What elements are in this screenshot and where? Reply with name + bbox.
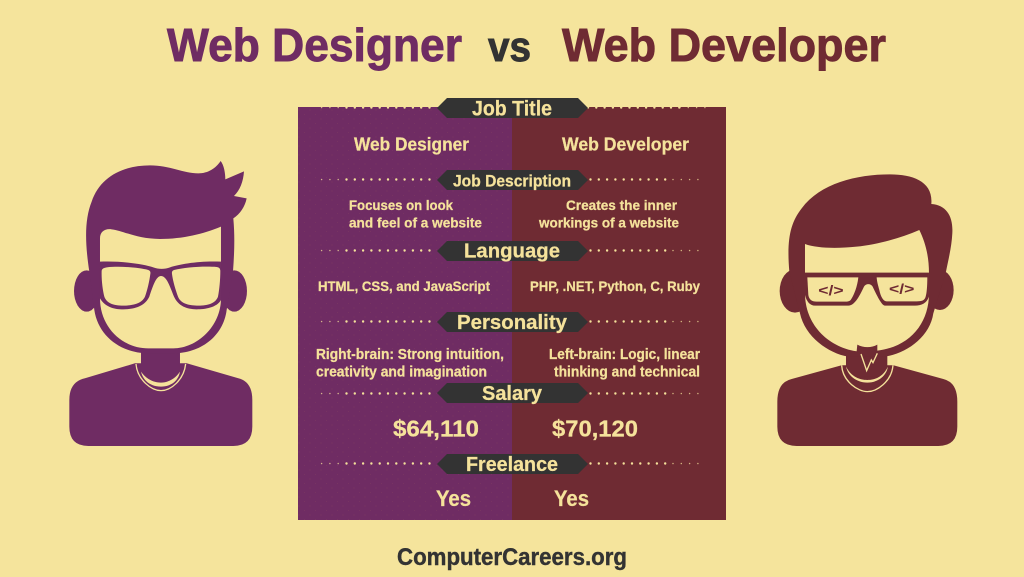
text: job descriptions: and feel of a website [349,214,482,230]
text: personalities: thinking and technical [554,364,700,380]
text: freelance answers: Yes [436,486,471,511]
banner: salary [437,383,588,405]
text: job descriptions: workings of a website [538,214,679,230]
footer source: ComputerCareers.org [397,544,627,571]
text: job descriptions [349,197,679,230]
banner: language [437,240,588,262]
text: salaries: $70,120 [552,416,638,442]
panel: comparison table [298,98,726,520]
banner: freelance: Freelance [466,454,558,476]
text: personalities: creativity and imagination [316,364,487,380]
text: job descriptions: Creates the inner [566,197,678,213]
icon: web developer avatar: </> [818,282,844,298]
text: languages: HTML, CSS, and JavaScript [318,278,490,294]
banner: freelance [437,454,588,476]
banner: personality: Personality [457,312,568,334]
banner: salary: Salary [482,383,543,405]
text: languages [318,278,700,294]
banner: language: Language [464,240,560,262]
text: freelance answers [436,486,589,511]
text: personalities [316,347,700,380]
column headings: job title: Web Developer [562,134,689,154]
icon: web developer avatar: </> [889,281,914,297]
text: salaries: $64,110 [393,416,479,442]
title: Web Developer [562,19,886,71]
text: freelance answers: Yes [554,486,589,511]
text: languages: PHP, .NET, Python, C, Ruby [530,278,700,294]
dotted rows [322,108,710,464]
text: personalities: Left-brain: Logic, linear [549,347,700,363]
panel: designer column [298,107,512,520]
title: Web Designer [167,19,462,71]
icon: web designer avatar [69,161,252,446]
text: salaries [393,416,638,442]
icon: web developer avatar [777,174,957,446]
column headings: job title [354,134,689,154]
banner: job description: Job Description [453,172,571,190]
title [167,19,886,71]
text: personalities: Right-brain: Strong intuition, [316,347,504,363]
column headings: job title: Web Designer [354,134,469,154]
text: job descriptions: Focuses on look [349,197,453,213]
banner: job title: Job Title [472,98,552,120]
panel: developer column [512,107,726,520]
title: vs [488,23,531,70]
banner: job title [437,98,588,120]
